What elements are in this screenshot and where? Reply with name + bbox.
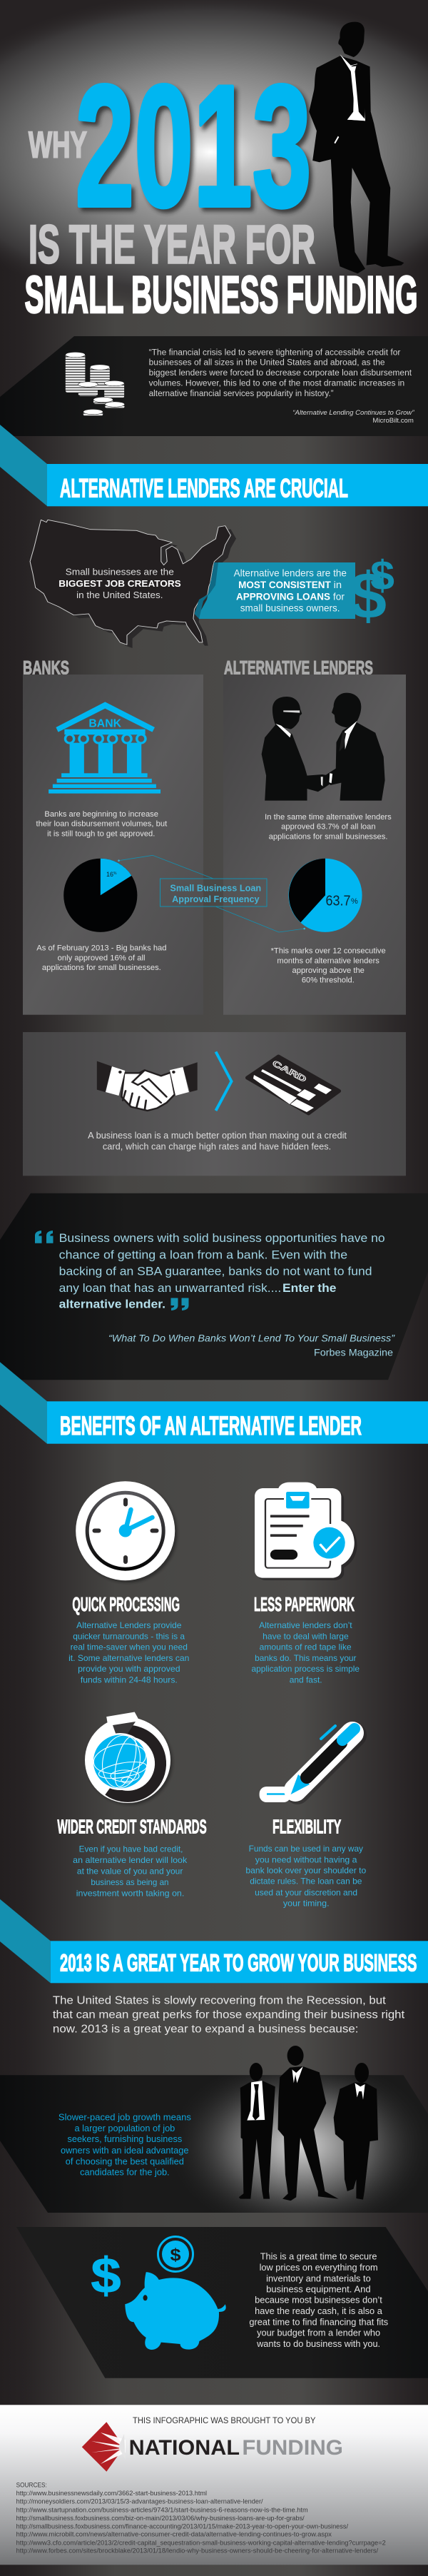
panel text: wants to do business with you. — [256, 2338, 380, 2349]
pie chart: alternative lenders 63.7% — [288, 859, 362, 932]
panel text: business equipment. And — [266, 2283, 371, 2294]
panel text — [249, 2251, 389, 2349]
sources list: http://moneysoldiers.com/2013/03/15/3-advantages-business-loan-alternative-lender/ — [16, 2498, 263, 2506]
panel text: low prices on everything from — [260, 2262, 378, 2273]
panel text — [58, 2112, 191, 2177]
icon: clipboard with check mark — [255, 1483, 357, 1580]
pie chart: banks 16%: 16 — [106, 871, 113, 878]
panel text: inventory and materials to — [266, 2273, 371, 2283]
logo: national funding: FUNDING — [242, 2436, 343, 2460]
quote citation: MicroBilt.com — [372, 417, 414, 425]
heading ribbon: alternative lenders are crucial — [0, 425, 428, 506]
benefit heading: QUICK PROCESSING — [72, 1593, 180, 1615]
heading ribbon: benefits of an alternative lender — [0, 1362, 428, 1444]
footer panel — [0, 2405, 428, 2565]
banks approval text: only approved 16% of all — [58, 954, 146, 962]
sources list: http://www.startupnation.com/business-articles/9743/1/start-business-6-reasons-now-is-the-time.htm — [16, 2506, 308, 2514]
loan comparison text — [88, 1131, 347, 1151]
benefit: quick processing — [68, 1481, 189, 1685]
panel: banks — [23, 675, 203, 1015]
icon: chevron arrow — [215, 1052, 231, 1111]
intro paragraph: that can mean great perks for those expanding their business right — [53, 2009, 405, 2021]
pie chart: banks 16% — [63, 859, 137, 932]
alternative lenders text: In the same time alternative lenders — [265, 813, 392, 822]
benefit text: real time-saver when you need — [71, 1642, 188, 1652]
panel text: Slower-paced job growth means — [58, 2112, 191, 2123]
panel text: because most businesses don’t — [255, 2294, 382, 2305]
benefit text: your timing. — [283, 1899, 330, 1909]
quote text: volumes. However, this led to one of the most dramatic increases in — [149, 380, 404, 388]
map caption: in the United States. — [76, 590, 163, 600]
map caption: BIGGEST JOB CREATORS — [58, 578, 181, 589]
pie chart: banks 16%: % — [113, 872, 117, 876]
panel text: seekers, furnishing business — [67, 2133, 183, 2144]
panel: job growth — [0, 2046, 428, 2213]
pie chart: alternative lenders 63.7%: % — [351, 897, 358, 906]
icon: teal dollar signs: $ — [370, 552, 394, 599]
callout: alternative lenders most consistent — [194, 562, 355, 619]
benefit text: Funds can be used in any way — [249, 1844, 363, 1854]
quote body text: Business owners with solid business opportunities have no — [59, 1231, 385, 1245]
banks approval text — [36, 944, 166, 972]
loan comparison text: A business loan is a much better option than maxing out a credit — [88, 1131, 347, 1141]
alternative lenders footnote: months of alternative lenders — [277, 956, 379, 965]
panel: loan versus credit card — [23, 1032, 406, 1176]
sources list: http://smallbusiness.foxbusiness.com/finance-accounting/2013/01/15/make-2013-year-to-open-your-own-business/ — [16, 2522, 348, 2530]
sources list: http://smallbusiness.foxbusiness.com/biz-on-main/2013/03/06/why-business-loans-are-up-for-grabs/ — [16, 2515, 305, 2522]
benefit text: Even if you have bad credit, — [79, 1844, 183, 1854]
benefit text: dictate rules. The loan can be — [250, 1876, 362, 1886]
icon: credit card: CARD — [271, 1059, 307, 1084]
panel text: This is a great time to secure — [260, 2251, 377, 2262]
callout: small business loan approval frequency — [118, 855, 305, 932]
map caption — [58, 567, 181, 600]
panel text: great time to find financing that fits — [249, 2316, 389, 2327]
benefit text: provide you with approved — [78, 1664, 180, 1674]
icon: credit card — [247, 1056, 340, 1113]
benefit text: funds within 24-48 hours. — [81, 1675, 178, 1685]
alternative lenders footnote: approving above the — [292, 966, 365, 975]
icon: standing businessman silhouette — [309, 22, 404, 273]
quote body text: any loan that has an unwarranted risk.... — [59, 1281, 281, 1295]
benefit text: an alternative lender will look — [73, 1855, 188, 1865]
credit line: THIS INFOGRAPHIC WAS BROUGHT TO YOU BY — [133, 2417, 316, 2425]
quote body text: backing of an SBA guarantee, banks do not want to fund — [59, 1265, 372, 1278]
panel: low prices and financing — [16, 2227, 428, 2378]
panel: forbes quote — [0, 1193, 428, 1380]
icon: clock — [76, 1481, 177, 1583]
quote body text: chance of getting a loan from a bank. Even with the — [59, 1248, 347, 1261]
banks text — [36, 810, 167, 838]
benefit text: banks do. This means your — [255, 1653, 357, 1663]
sources list: http://www3.cfo.com/article/2013/2/credit-capital_sequestration-small-business-working-capital-alternative-lending?currpage=2 — [16, 2540, 386, 2547]
benefit text: you need without having a — [255, 1854, 357, 1864]
icon: teal dollar signs: $ — [350, 560, 387, 632]
benefit text: have to deal with large — [263, 1631, 349, 1641]
benefit text — [251, 1620, 360, 1685]
sources list: http://www.businessnewsdaily.com/3662-start-business-2013.html — [16, 2490, 207, 2497]
alternative lenders footnote — [271, 947, 386, 985]
alternative lenders text: approved 63.7% of all loan — [281, 823, 376, 832]
banks approval text: applications for small businesses. — [42, 964, 161, 972]
icon: bank building: BANK — [88, 718, 121, 729]
callout: alternative lenders most consistent: Alternative lenders are the — [234, 567, 347, 579]
quote text: alternative financial services popularity in history.” — [149, 390, 334, 398]
benefit text: business as being an — [91, 1877, 168, 1887]
benefit: less paperwork — [251, 1483, 360, 1685]
quote citation: “What To Do When Banks Won’t Lend To Your Small Business” — [108, 1332, 395, 1343]
sources list: http://www.microbilt.com/news/alternative-consumer-credit-data/alternative-lending-continues-to-grow.aspx — [16, 2531, 332, 2539]
benefit text: Alternative Lenders provide — [76, 1620, 182, 1630]
banks text: it is still tough to get approved. — [47, 829, 155, 838]
benefit text: Alternative lenders don’t — [259, 1620, 352, 1630]
quote text — [149, 348, 412, 398]
benefit text: used at your discretion and — [255, 1887, 357, 1897]
quote citation: “Alternative Lending Continues to Grow” — [292, 409, 414, 417]
icon: piggy bank — [125, 2272, 226, 2350]
icon: bank building — [49, 702, 160, 794]
banks approval text: As of February 2013 - Big banks had — [36, 944, 166, 953]
quote text: “The financial crisis led to severe tightening of accessible credit for — [149, 348, 401, 357]
benefit text: bank look over your shoulder to — [245, 1865, 367, 1875]
benefit text — [73, 1844, 188, 1898]
callout: small business loan approval frequency: Approval Frequency — [172, 894, 260, 904]
benefit text: at the value of you and your — [77, 1866, 183, 1876]
banks text: Banks are beginning to increase — [44, 810, 158, 819]
quote citation — [292, 409, 414, 425]
panel: alternative lenders — [223, 675, 406, 1015]
icon: coin — [158, 2237, 193, 2271]
intro paragraph: The United States is slowly recovering from the Recession, but — [53, 1995, 387, 2007]
callout: small business loan approval frequency: Small Business Loan — [170, 882, 261, 894]
alternative lenders text: applications for small businesses. — [269, 832, 388, 841]
alternative lenders footnote: *This marks over 12 consecutive — [271, 947, 386, 956]
benefit: wider credit standards — [57, 1716, 207, 1898]
icon: opening quote mark — [35, 1231, 53, 1243]
panel: opening quote — [0, 336, 428, 436]
benefit text — [245, 1844, 367, 1909]
icon: handshake — [97, 1061, 198, 1111]
map caption: Small businesses are the — [66, 567, 174, 577]
panel text: your budget from a lender who — [257, 2328, 380, 2338]
banks text: their loan disbursement volumes, but — [36, 820, 167, 829]
pie chart: alternative lenders 63.7%: 63.7 — [325, 893, 351, 909]
intro paragraph: now. 2013 is a great year to expand a business because: — [53, 2023, 359, 2035]
icon: coin stacks — [66, 352, 125, 416]
quote body text — [59, 1231, 385, 1311]
loan comparison text: card, which can charge high rates and have hidden fees. — [103, 1141, 331, 1151]
quote body text: Enter the — [282, 1281, 336, 1295]
sources list: SOURCES: — [16, 2481, 47, 2489]
benefit heading: FLEXIBILITY — [272, 1816, 341, 1838]
quote body text: alternative lender. — [59, 1298, 165, 1311]
callout: alternative lenders most consistent: for — [333, 591, 345, 602]
callout: alternative lenders most consistent: small business owners. — [240, 602, 340, 614]
benefit: flexibility — [245, 1726, 367, 1909]
benefit heading: WIDER CREDIT STANDARDS — [57, 1816, 207, 1838]
benefit text: investment worth taking on. — [76, 1888, 184, 1898]
logo: national funding: NATIONAL — [129, 2436, 240, 2460]
callout: alternative lenders most consistent: APPROVING LOANS — [236, 591, 330, 602]
icon: closing quote mark — [171, 1298, 188, 1310]
alternative lenders text — [265, 813, 392, 841]
alternative lenders footnote: 60% threshold. — [302, 976, 355, 985]
benefit text: amounts of red tape like — [260, 1642, 352, 1652]
benefit text: application process is simple — [251, 1664, 360, 1674]
panel text: a larger population of job — [74, 2123, 175, 2133]
icon: dollar sign: $ — [91, 2248, 121, 2303]
quote citation: Forbes Magazine — [314, 1346, 393, 1358]
hero section — [0, 0, 428, 324]
panel text: owners with an ideal advantage — [61, 2145, 188, 2156]
quote text: businesses of all sizes in the United States and abroad, as the — [149, 359, 385, 368]
benefit text: and fast. — [290, 1675, 322, 1685]
callout: alternative lenders most consistent: in — [334, 579, 342, 590]
icon: three businessmen silhouettes — [239, 2046, 378, 2201]
callout: alternative lenders most consistent: MOST CONSISTENT — [238, 579, 331, 590]
panel text: of choosing the best qualified — [66, 2156, 184, 2166]
heading ribbon: 2013 is a great year — [0, 1899, 428, 1983]
hero word: why: WHY — [29, 124, 87, 166]
benefit text: quicker turnarounds - this is a — [73, 1631, 185, 1641]
benefit text — [68, 1620, 189, 1685]
icon: coin: $ — [170, 2246, 181, 2265]
panel text: candidates for the job. — [80, 2166, 170, 2177]
sources list — [16, 2481, 386, 2555]
icon: businessmen shaking hands — [262, 693, 385, 801]
quote citation — [108, 1332, 395, 1358]
heading: banks: BANKS — [23, 657, 69, 678]
panel text: have the ready cash, it is also a — [255, 2305, 383, 2316]
benefit text: it. Some alternative lenders can — [68, 1653, 189, 1663]
icon: globe with arrow — [85, 1716, 173, 1805]
intro paragraph — [53, 1995, 405, 2035]
map of the united states — [30, 520, 236, 648]
quote text: biggest lenders were forced to decrease corporate loan disbursement — [149, 369, 412, 378]
sources list: http://www.forbes.com/sites/brockblake/2013/01/18/lendio-why-business-owners-should-be-cheering-for-alternative-lenders/ — [16, 2547, 378, 2555]
icon: pen drawing a line — [260, 1726, 355, 1802]
logo: national funding — [82, 2422, 343, 2472]
